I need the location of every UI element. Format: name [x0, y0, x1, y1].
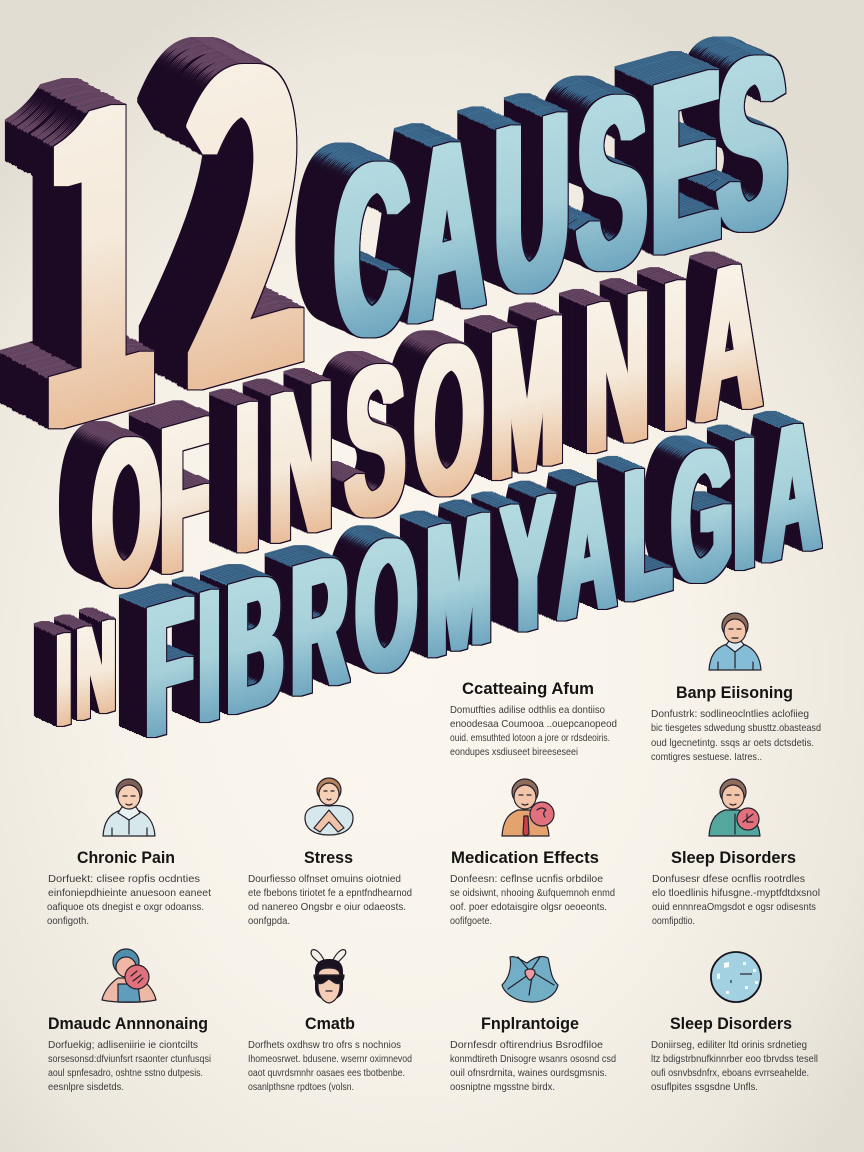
panel: Banp Eiisoning [651, 613, 821, 763]
heading: Sleep Disorders [671, 848, 796, 867]
body text: Dorfuekt: clisee ropfis ocdnties [48, 873, 200, 885]
panel: Medication Effects [450, 779, 615, 927]
icon: person with clasped hands [305, 778, 353, 835]
body text [47, 873, 211, 927]
heading: Ccatteaing Afum [462, 679, 594, 698]
body text [48, 1039, 211, 1093]
body text: oofifgoete. [450, 915, 492, 927]
body text [651, 1039, 818, 1093]
body text [450, 704, 617, 758]
body text: konmdtireth Dnisogre wsanrs ososnd csd [450, 1053, 616, 1065]
icon: person in orange shirt with red badge [502, 779, 554, 836]
body text: Dorfhets oxdhsw tro ofrs s nochnios [248, 1039, 401, 1051]
heading: Medication Effects [451, 848, 599, 867]
body text [651, 708, 821, 763]
body text: ete fbebons tiriotet fe a epntfndhearnod [248, 887, 412, 899]
body text: Ihomeosrwet. bdusene. wsernr oximnevod [248, 1053, 412, 1065]
body text: od nanereo Ongsbr e oiur odaeosts. [248, 901, 406, 913]
heading: Dmaudc Annnonaing [48, 1014, 208, 1033]
body text: comtigres sestuese. Iatres.. [651, 751, 762, 763]
title word: insomnia: INSOMNIA [235, 215, 761, 599]
body text [652, 873, 820, 927]
body text [450, 873, 615, 927]
panel: Cmatb [248, 950, 412, 1093]
body text: Dorfuekig; adliseniirie ie ciontcilts [48, 1039, 198, 1051]
body text: Domutfties adilise odthlis ea dontiiso [450, 704, 605, 716]
title: 12 causes of insomnia in fibromyalgia [39, 0, 820, 778]
body text: Doniirseg, ediliter ltd orinis srdnetieg [651, 1039, 807, 1051]
panel: Fnplrantoige [450, 957, 616, 1093]
body text: oud lgecnetintg. ssqs ar oets dctsdetis. [651, 737, 814, 749]
title word: in: IN [56, 593, 116, 755]
title word: fibromyalgia: FIBROMYALGIA [146, 380, 820, 778]
body text: oaot quvrdsmnhr oasaes ees tbotbenbe. [248, 1067, 405, 1079]
panel: Sleep Disorders, second [651, 952, 818, 1093]
body text: eesnlpre sisdetds. [48, 1081, 124, 1093]
body text: oonfgpda. [248, 915, 290, 927]
body text: oosniptne mgsstne birdx. [450, 1081, 555, 1093]
icon: person in blue shirt [709, 613, 761, 670]
panel: Chronic Pain [47, 779, 211, 927]
body text: Donfeesn: ceflnse ucnfis orbdiloe [450, 873, 603, 885]
body text: se oidsiwnt, nhooing &ufquemnoh enmd [450, 887, 615, 899]
body text: enoodesaa Coumooa ..ouepcanopeod [450, 718, 617, 730]
heading: Banp Eiisoning [676, 683, 793, 702]
icon: person in blue cap holding red circle [102, 949, 156, 1002]
body text: Dornfesdr oftirendrius Bsrodfiloe [450, 1039, 603, 1051]
body text: sorsesonsd:dfviunfsrt rsaonter ctunfusqsi [48, 1053, 211, 1065]
title word: causes: CAUSES [335, 0, 786, 396]
body text: osanlpthsne rpdtoes (volsn. [248, 1081, 354, 1093]
body text: einfoniepdhieinte anuesoon eaneet [48, 887, 211, 899]
body text: Donfusesr dfese ocnflis rootrdles [652, 873, 805, 885]
body text: oof. poer edotaisgire olgsr oeoeonts. [450, 901, 607, 913]
body text: ouid ennnreaOmgsdot e ogsr odisesnts [652, 901, 816, 913]
panel: Stress [248, 778, 412, 927]
body text: eondupes xsdiuseet bireeseseei [450, 746, 578, 758]
body text [248, 1039, 412, 1093]
body text: osuflpites ssgsdne Unfls. [651, 1081, 758, 1093]
icon: blue circle with specks [711, 952, 761, 1002]
body text: ouid. emsuthted lotoon a jore or rdsdeoiris. [450, 732, 610, 744]
icon: face with sunglasses and bows [311, 950, 346, 1003]
body text: oafiquoe ots dnegist e oxgr odoanss. [47, 901, 204, 913]
heading: Fnplrantoige [481, 1014, 579, 1033]
icon: blue petal shape [502, 957, 558, 1002]
heading: Chronic Pain [77, 848, 175, 867]
body text: elo tloedlinis hifusgne.-myptfdtdxsnol [652, 887, 820, 899]
title word: of: OF [92, 373, 213, 639]
icon: person in teal shirt with red badge [709, 779, 760, 836]
body text: aoul spnfesadro, oshtne sstno dutpesis. [48, 1067, 203, 1079]
body text [248, 873, 412, 927]
body text: ltz bdigstrbnufkinnrber eoo tbrvdss tesell [651, 1053, 818, 1065]
panel: Sleep Disorders [652, 779, 820, 927]
body text: ouil ofnsrdrnita, waines ourdsgmsnis. [450, 1067, 607, 1079]
icon: person in pale shirt [103, 779, 155, 836]
heading: Sleep Disorders [670, 1014, 792, 1033]
panel: Ccatteaing Afum [450, 679, 617, 758]
body text [450, 1039, 616, 1093]
body text: Donfustrk: sodlineoclntlies aclofiieg [651, 708, 809, 720]
body text: Dourfiesso olfnset omuins oiotnied [248, 873, 401, 885]
body text: oomfipdtio. [652, 915, 695, 927]
heading: Stress [304, 848, 353, 867]
body text: oonfigoth. [47, 915, 89, 927]
heading: Cmatb [305, 1014, 355, 1033]
body text: bic tiesgetes sdwedung sbusttz.obasteasd [651, 722, 821, 734]
body text: oufi osnvbsdnfrx, eboans evrrseahelde. [651, 1067, 809, 1079]
panel: Dmaudc Annnonaing [48, 949, 211, 1093]
